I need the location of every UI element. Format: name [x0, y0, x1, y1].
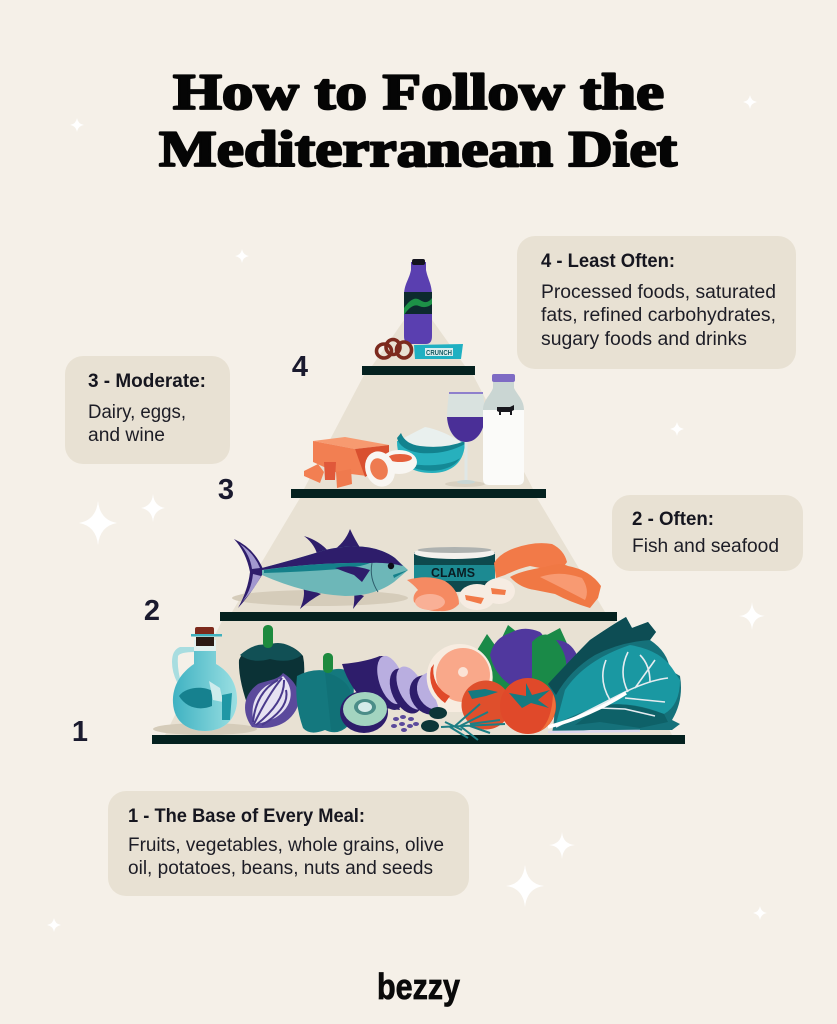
icon: grapefruit — [427, 644, 493, 712]
icon: crunch bar: CRUNCH — [426, 350, 452, 357]
icon: red onion — [245, 673, 299, 728]
title: How to Follow the — [173, 65, 664, 121]
icon: shrimp — [407, 577, 459, 611]
icon: soda bottle — [404, 259, 432, 344]
icon: olive oil bottle — [172, 627, 237, 731]
icon: milk bottle — [483, 374, 524, 485]
callout: least often: Processed foods, saturated — [541, 282, 776, 303]
icon: wine glass — [447, 392, 485, 484]
callout: moderate: 3 - Moderate: — [88, 371, 206, 392]
icon: clams can — [414, 547, 495, 592]
icon: eggplant slices — [342, 652, 460, 722]
callout: often — [612, 495, 803, 571]
icon: seeds — [391, 715, 419, 732]
tier number 4: 4 — [292, 351, 308, 383]
pyramid backdrop — [165, 300, 672, 735]
icon: teal bell pepper — [296, 653, 354, 733]
callout: often: Fish and seafood — [632, 536, 779, 557]
callout: base of every meal — [108, 791, 469, 896]
icon: eggs — [360, 447, 417, 491]
icon: cheese block — [304, 437, 389, 488]
icon: dill sprig — [441, 704, 505, 740]
icon: pretzels — [376, 340, 412, 358]
callout: moderate — [65, 356, 230, 464]
callout: base of every meal: 1 - The Base of Every Meal: — [128, 806, 365, 827]
callout: least often — [517, 236, 796, 369]
tier 1 foods — [153, 617, 681, 740]
tier number 1: 1 — [72, 716, 88, 748]
icon: yogurt bowl — [397, 427, 465, 473]
tier number 3: 3 — [218, 474, 234, 506]
icon: chard leaf — [548, 617, 681, 733]
callout: moderate: Dairy, eggs, — [88, 402, 186, 423]
icon: purple cabbage and greens — [476, 625, 577, 690]
callout: often: 2 - Often: — [632, 509, 714, 530]
sparkles — [47, 95, 767, 932]
icon: tuna — [234, 529, 408, 609]
icon: kiwi — [340, 691, 388, 733]
icon: olives — [421, 707, 447, 732]
icon: clams can: CLAMS — [431, 565, 475, 580]
tier 3 foods — [304, 374, 524, 491]
tier 2 foods — [232, 529, 601, 611]
icon: tomatoes — [462, 678, 556, 734]
icon: open clams — [459, 578, 515, 610]
title — [159, 65, 677, 178]
icon: salmon fillets — [494, 543, 601, 608]
logo: bezzy: bezzy — [377, 966, 460, 1007]
title: Mediterranean Diet — [159, 122, 677, 178]
callout: moderate: and wine — [88, 425, 165, 446]
icon: dark bell pepper — [239, 625, 304, 712]
callout: least often: sugary foods and drinks — [541, 329, 747, 350]
callout: base of every meal: oil, potatoes, beans, nuts and seeds — [128, 858, 433, 879]
callout: least often: 4 - Least Often: — [541, 251, 675, 272]
tier 4 foods — [376, 259, 463, 359]
tier number 2: 2 — [144, 595, 160, 627]
callout: base of every meal: Fruits, vegetables, whole grains, olive — [128, 835, 444, 856]
callout: least often: fats, refined carbohydrates, — [541, 305, 776, 326]
shelves — [152, 366, 685, 744]
